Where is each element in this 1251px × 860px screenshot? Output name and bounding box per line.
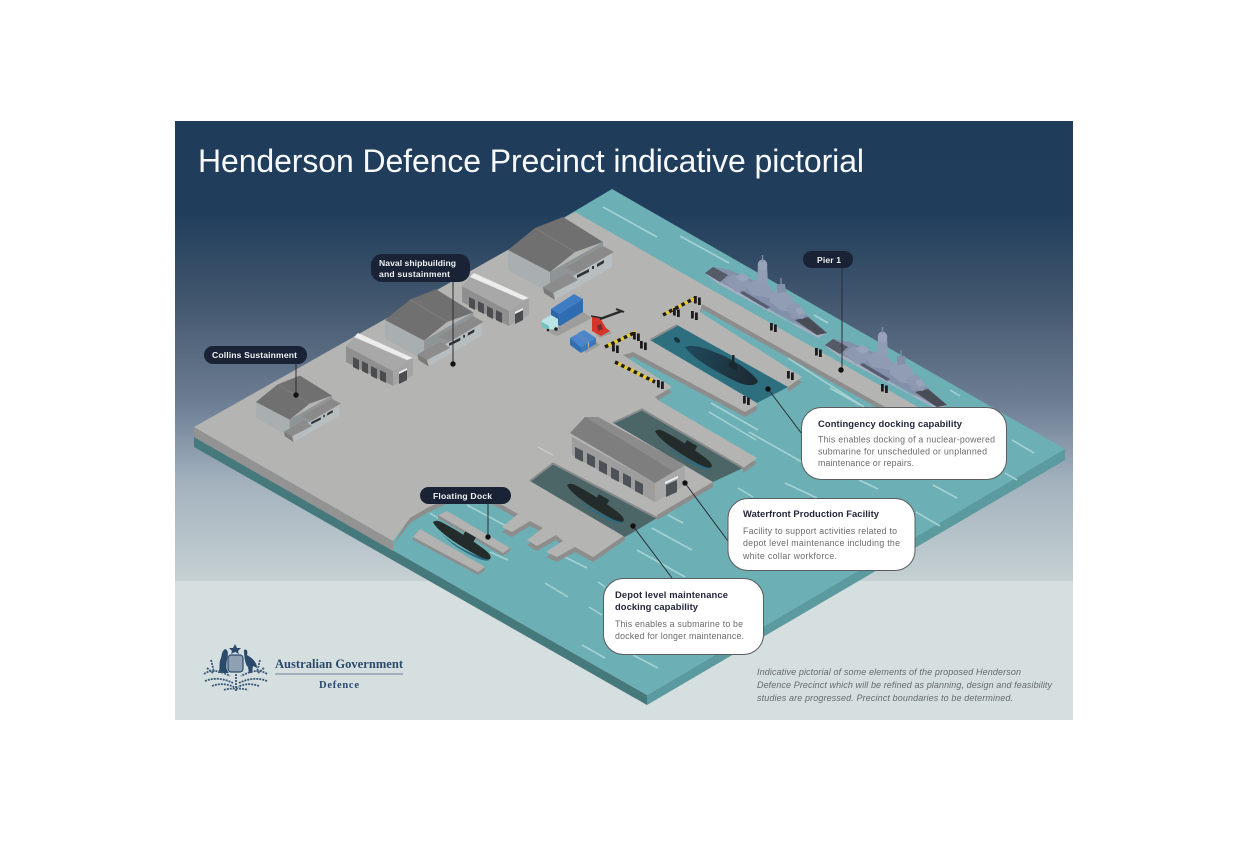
disclaimer note: Defence Precinct which will be refined as planning, design and feasibility xyxy=(757,680,1052,690)
disclaimer note xyxy=(757,667,1052,703)
callout: Waterfront Production Facility: Waterfront Production Facility xyxy=(743,508,880,519)
title: Henderson Defence Precinct indicative pictorial xyxy=(198,143,864,179)
label: Pier 1 xyxy=(803,251,853,373)
label: Collins Sustainment: Collins Sustainment xyxy=(212,350,297,360)
disclaimer note: studies are progressed. Precinct boundaries to be determined. xyxy=(757,693,1013,703)
Australian Government Defence wordmark: Australian Government xyxy=(275,657,404,671)
security barrier: middle xyxy=(605,332,636,347)
hangar: Collins sustainment xyxy=(256,376,341,442)
callout: Waterfront Production Facility: white collar workforce. xyxy=(742,551,837,561)
red reach stacker crane xyxy=(591,309,624,338)
submarine: upper depot dock xyxy=(650,424,717,473)
callout: Depot level maintenance docking capability: docking capability xyxy=(615,601,699,612)
label: Floating Dock: Floating Dock xyxy=(433,491,492,501)
shed: lower xyxy=(346,333,413,386)
callout: Contingency docking capability xyxy=(765,386,1006,480)
land top surface with piers and jetties xyxy=(194,212,925,557)
water base xyxy=(194,189,1065,705)
land side face: front-left edge xyxy=(194,427,393,551)
submarine: contingency dock xyxy=(685,346,758,385)
submarine: floating dock xyxy=(428,515,496,565)
disclaimer note: Indicative pictorial of some elements of the proposed Henderson xyxy=(757,667,1021,677)
callout: Contingency docking capability: maintenance or repairs. xyxy=(818,458,914,468)
upper depot dock xyxy=(613,409,743,488)
label: Naval shipbuilding and sustainment xyxy=(371,254,470,367)
bollards xyxy=(612,296,888,405)
land platform extrusion xyxy=(393,217,925,562)
label: Collins Sustainment xyxy=(204,346,307,398)
callout: Depot level maintenance docking capability: docked for longer maintenance. xyxy=(615,631,744,641)
label: Naval shipbuilding and sustainment: and sustainment xyxy=(379,269,450,279)
security barrier: top xyxy=(663,298,695,315)
floating dock pontoons xyxy=(413,511,510,575)
callout: Waterfront Production Facility: depot level maintenance including the xyxy=(743,538,900,548)
small vessel in dock xyxy=(673,336,681,344)
callout: Waterfront Production Facility xyxy=(682,480,915,570)
contingency dock water xyxy=(650,325,788,409)
water ripple lines xyxy=(430,207,1034,668)
label: Naval shipbuilding and sustainment: Naval shipbuilding xyxy=(379,258,456,268)
callout: Waterfront Production Facility: Facility to support activities related to xyxy=(743,526,897,536)
Australian Government Defence wordmark xyxy=(275,657,404,691)
callout: Contingency docking capability: submarine for unscheduled or unplanned xyxy=(818,446,987,456)
Australian Government Defence wordmark: Defence xyxy=(319,680,359,691)
hangar: naval shipbuilding xyxy=(385,289,484,366)
hangar: top xyxy=(508,217,614,300)
callout: Contingency docking capability: This enables docking of a nuclear-powered xyxy=(818,434,995,444)
shed: upper xyxy=(462,273,529,326)
callout: Depot level maintenance docking capability: This enables a submarine to be xyxy=(615,619,743,629)
callout: Depot level maintenance docking capability xyxy=(604,523,764,654)
lower depot dock xyxy=(530,463,657,544)
truck with blue container xyxy=(542,294,592,336)
frigate: second at pier xyxy=(825,327,947,410)
Australian Government crest xyxy=(204,644,267,692)
lower pale panel xyxy=(175,581,1073,720)
frigate: first at pier xyxy=(705,255,827,338)
callout: Depot level maintenance docking capability: Depot level maintenance xyxy=(615,589,728,600)
submarine: lower depot dock xyxy=(562,478,629,527)
background sky panel xyxy=(175,121,1073,582)
blue shipping containers xyxy=(570,330,600,353)
security barrier: lower xyxy=(615,362,655,382)
label: Pier 1: Pier 1 xyxy=(817,255,841,265)
waterfront production facility building xyxy=(570,417,685,502)
isometric precinct scene xyxy=(194,189,1065,705)
label: Floating Dock xyxy=(420,487,511,540)
faint marking on land xyxy=(538,447,553,455)
callout: Contingency docking capability: Contingency docking capability xyxy=(818,418,963,429)
